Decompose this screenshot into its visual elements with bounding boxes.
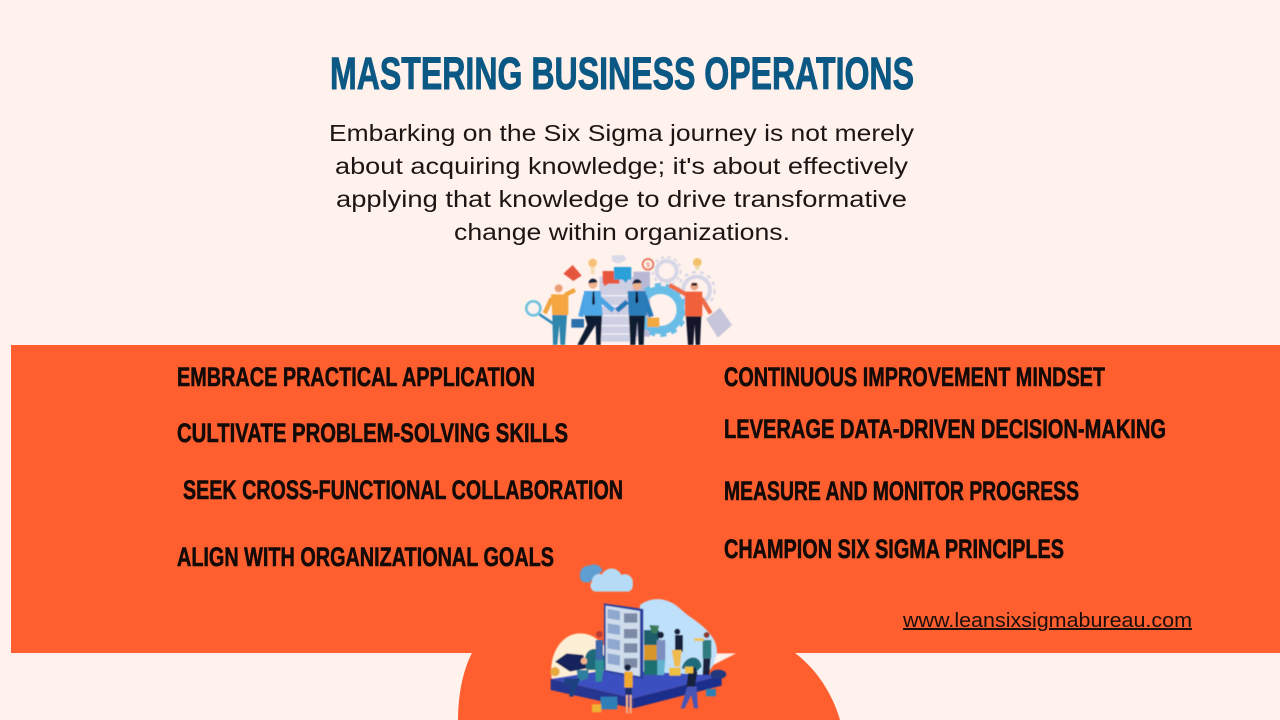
person: left with magnifier — [526, 284, 575, 345]
person: walking in front — [681, 667, 698, 708]
list: right column — [724, 362, 1166, 564]
icon: dollar coin — [643, 259, 653, 270]
icon: clouds — [580, 564, 633, 592]
plants — [550, 649, 726, 679]
person: man with briefcase — [571, 279, 613, 345]
app screen — [604, 603, 643, 679]
person: holding trophy — [649, 625, 665, 675]
blue blob background — [640, 599, 717, 675]
icon: speech bubbles — [603, 267, 631, 286]
website link text: www.leansixsigmabureau.com — [902, 610, 1192, 632]
bottom arch — [458, 653, 840, 720]
item: seek cross-functional collaboration: SEEK CROSS-FUNCTIONAL COLLABORATION — [183, 475, 623, 505]
illustration: team on app platform — [550, 564, 736, 713]
person: standing at screen — [595, 631, 604, 682]
item: cultivate problem-solving skills: CULTIVATE PROBLEM-SOLVING SKILLS — [177, 418, 568, 448]
person: front with yellow shirt — [624, 664, 633, 713]
person: right with binoculars — [694, 632, 711, 675]
person: seated with laptop — [563, 658, 588, 697]
intro paragraph: change within organizations. — [454, 219, 790, 245]
icon: dollar coin: $ — [646, 262, 650, 269]
cream blob background — [551, 633, 607, 678]
panel: orange band — [11, 345, 1280, 653]
item: align with organizational goals: ALIGN WITH ORGANIZATIONAL GOALS — [177, 542, 554, 572]
icon: gray gears — [653, 257, 715, 308]
list: left column — [177, 362, 623, 572]
icon: handshake badge — [611, 255, 627, 264]
icon: envelope — [563, 265, 582, 281]
platform — [551, 670, 722, 708]
icon: blue gear — [635, 285, 686, 335]
icon: light bulb left — [588, 259, 597, 274]
title: MASTERING BUSINESS OPERATIONS — [330, 48, 914, 99]
intro paragraph: about acquiring knowledge; it's about effectively — [335, 153, 908, 179]
intro paragraph: Embarking on the Six Sigma journey is not merely — [329, 120, 914, 146]
item: measure and monitor progress: MEASURE AND MONITOR PROGRESS — [724, 476, 1079, 506]
item: embrace practical application: EMBRACE PRACTICAL APPLICATION — [177, 362, 535, 392]
illustration: business team handshake — [526, 255, 732, 345]
icon: light bulb right — [693, 258, 702, 270]
boxes — [592, 667, 716, 712]
stacked blocks — [644, 630, 659, 675]
icon: document — [599, 272, 650, 342]
person: man shaking hands — [617, 279, 659, 345]
person: right pointing with folder — [669, 282, 732, 345]
intro paragraph: applying that knowledge to drive transformative — [336, 186, 907, 212]
intro paragraph — [329, 120, 914, 245]
person: standing with orange trousers — [672, 629, 683, 667]
white wedge — [713, 653, 736, 665]
item: continuous improvement mindset: CONTINUOUS IMPROVEMENT MINDSET — [724, 362, 1105, 392]
item: champion six sigma principles: CHAMPION SIX SIGMA PRINCIPLES — [724, 534, 1064, 564]
